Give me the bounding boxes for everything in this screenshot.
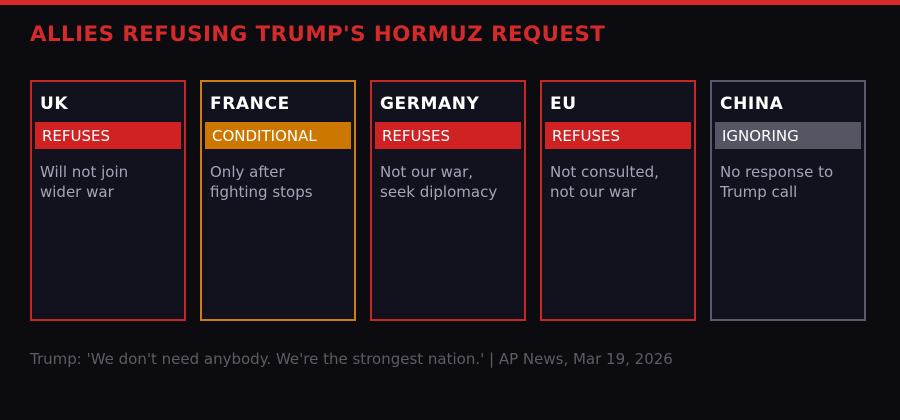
description: EU: not our war [550, 183, 637, 201]
footer quote and source: Trump: 'We don't need anybody. We're the strongest nation.' | AP News, Mar 19, 2026 [30, 350, 673, 368]
badge: refuses: REFUSES [382, 127, 450, 145]
panel: France [200, 80, 356, 321]
badge: conditional: CONDITIONAL [212, 127, 317, 145]
description: Germany: seek diplomacy [380, 183, 497, 201]
description: France [210, 163, 313, 201]
description: China: No response to [720, 163, 833, 181]
badge: refuses: REFUSES [552, 127, 620, 145]
description: UK: Will not join [40, 163, 128, 181]
description: EU [550, 163, 659, 201]
panel: EU [540, 80, 696, 321]
panel: UK [30, 80, 186, 321]
country name: China: CHINA [720, 94, 783, 114]
description: UK [40, 163, 128, 201]
country name: France: FRANCE [210, 94, 290, 114]
badge: refuses [375, 122, 521, 149]
country name: Germany: GERMANY [380, 94, 479, 114]
panel: China [710, 80, 866, 321]
country name: UK: UK [40, 94, 68, 114]
badge: refuses: REFUSES [42, 127, 110, 145]
description: Germany: Not our war, [380, 163, 473, 181]
description: China [720, 163, 833, 201]
description: France: Only after [210, 163, 285, 181]
badge: refuses [545, 122, 691, 149]
badge: ignoring: IGNORING [722, 127, 799, 145]
description: France: fighting stops [210, 183, 313, 201]
badge: conditional [205, 122, 351, 149]
badge: ignoring [715, 122, 861, 149]
panel: Germany [370, 80, 526, 321]
description: China: Trump call [720, 183, 797, 201]
badge: refuses [35, 122, 181, 149]
description: EU: Not consulted, [550, 163, 659, 181]
description: Germany [380, 163, 497, 201]
title: ALLIES REFUSING TRUMP'S HORMUZ REQUEST [30, 22, 605, 47]
description: UK: wider war [40, 183, 114, 201]
country name: EU: EU [550, 94, 577, 114]
